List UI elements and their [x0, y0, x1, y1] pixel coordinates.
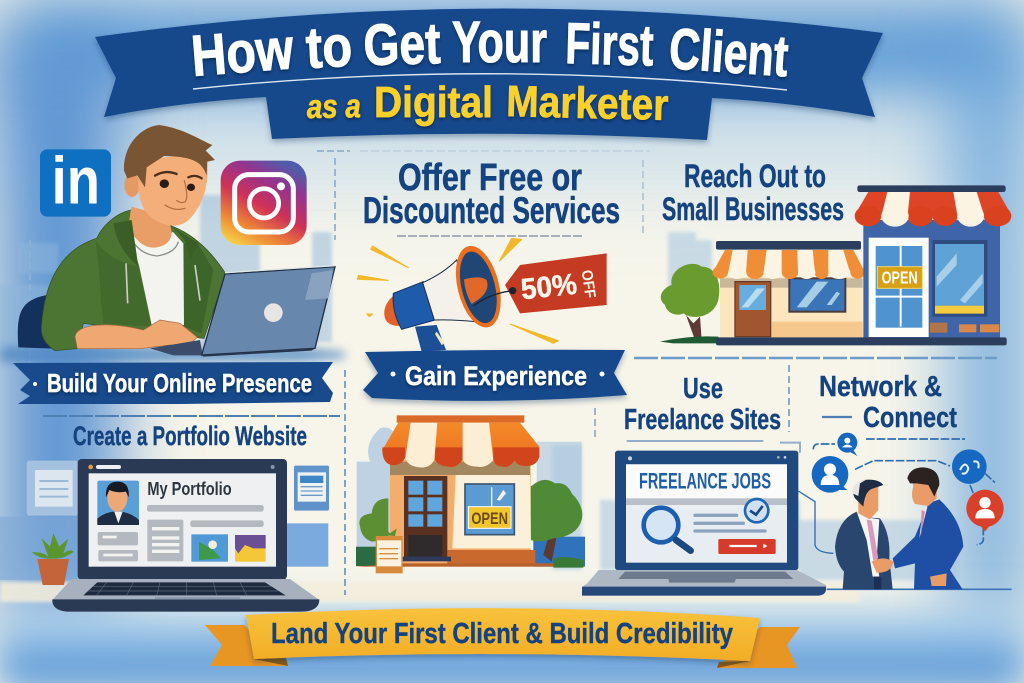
- bubble: profile red: [966, 490, 1004, 532]
- trees: [359, 480, 583, 568]
- icon: linkedin: in: [52, 144, 100, 218]
- title line 2: Digital: [374, 78, 493, 127]
- panel: build your online presence: [13, 125, 335, 404]
- heading: Freelance Sites: [624, 404, 781, 436]
- skyline right: [552, 232, 958, 580]
- laptop: [52, 459, 319, 612]
- illustration: freelance laptop: FREELANCE JOBS: [639, 468, 771, 493]
- title line 2: Marketer: [506, 77, 669, 130]
- title line 2: [306, 77, 669, 130]
- bubble: chat: [952, 449, 987, 484]
- panel: offer free or discounted services: [357, 157, 620, 352]
- tree: [660, 264, 719, 343]
- heading: Network &: [819, 371, 942, 403]
- title banner: [95, 8, 883, 140]
- heading: Reach Out to: [684, 158, 826, 194]
- left tail: [205, 625, 288, 666]
- background cards: [0, 461, 328, 580]
- heading: Use: [683, 373, 723, 405]
- discount tag: OFF: [578, 269, 598, 299]
- shop walls: [354, 460, 553, 567]
- awning: [382, 415, 539, 467]
- document icon: [294, 466, 329, 511]
- heading: [363, 157, 620, 231]
- right tail: [717, 627, 800, 668]
- title line 1: Get: [363, 11, 441, 78]
- heading: Offer Free or: [398, 157, 582, 199]
- discount tag: [505, 253, 607, 313]
- open window: [465, 484, 514, 535]
- bubble: profile top: [837, 433, 857, 456]
- banner rule: [193, 74, 787, 90]
- small shop: [713, 241, 865, 338]
- main ribbon: [246, 608, 760, 661]
- heading: [819, 371, 957, 434]
- discount tag: 50%: [519, 268, 578, 306]
- heading: [624, 373, 781, 436]
- title line 2: as a: [306, 87, 361, 125]
- door: [403, 476, 451, 561]
- title line 1: First: [565, 11, 654, 78]
- ribbon: build your online presence: [13, 362, 333, 404]
- panel: network and connect: [812, 371, 1012, 589]
- title line 1: How: [189, 16, 296, 89]
- background scenery: [356, 427, 585, 567]
- ribbon text: Land Your First Client & Build Credibility: [271, 618, 733, 650]
- person right: [872, 467, 963, 589]
- plant: [32, 533, 74, 585]
- icon: megaphone with discount tag: [357, 238, 607, 352]
- ground line: [827, 587, 1012, 592]
- open window: OPEN: [471, 509, 508, 528]
- panel: gain experience storefront: [354, 415, 585, 573]
- ribbon: gain experience: [363, 350, 627, 401]
- heading: [662, 158, 844, 227]
- icon: instagram: [221, 161, 307, 245]
- ribbon: land your first client: [205, 608, 800, 668]
- title line 1: Client: [667, 16, 790, 89]
- illustration: portfolio laptop: [0, 459, 329, 612]
- icon: magnifier: [644, 508, 691, 551]
- large shop: OPEN: [882, 267, 918, 287]
- sidewalk sign: [376, 528, 403, 573]
- heading: Connect: [863, 402, 957, 434]
- panel: use freelance sites: [582, 373, 833, 596]
- illustration: handshake and profile bubbles: [812, 433, 1012, 589]
- title line 1: Your: [452, 10, 547, 75]
- large shop: [716, 185, 1011, 345]
- heading: Discounted Services: [363, 190, 620, 231]
- table strip: [0, 347, 345, 362]
- button: [718, 539, 776, 554]
- icon: check badge: [745, 499, 768, 522]
- panel: create a portfolio website: [0, 421, 329, 612]
- ribbon: build your online presence: Build Your Online Presence: [47, 368, 312, 398]
- banner shape: [95, 8, 883, 140]
- illustration: freelance laptop: [582, 441, 833, 596]
- title line 1: [189, 10, 790, 89]
- ribbon: gain experience: Gain Experience: [405, 361, 587, 391]
- icon: person at laptop: [18, 125, 335, 357]
- person left: [835, 479, 893, 589]
- heading: Small Businesses: [662, 191, 844, 227]
- illustration: two storefronts: [660, 185, 1011, 345]
- title line 1: to: [304, 14, 354, 81]
- heading: Create a Portfolio Website: [73, 421, 307, 451]
- portfolio text: My Portfolio: [147, 478, 232, 499]
- laptop base: [582, 570, 826, 596]
- skyline left: [0, 195, 332, 345]
- panel: reach out to small businesses: [660, 158, 1011, 345]
- dashed dividers: [30, 151, 997, 595]
- desk band: [0, 582, 860, 602]
- photo: [97, 481, 139, 525]
- bubble: profile left: [812, 456, 848, 493]
